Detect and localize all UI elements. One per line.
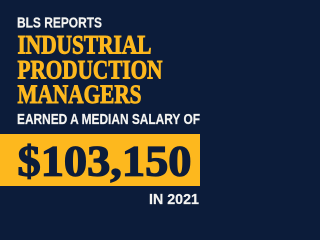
year label: IN 2021 (149, 192, 199, 208)
heading: occupation: INDUSTRIAL (18, 30, 152, 60)
salary figure: $103,150 (18, 138, 192, 186)
intro text: BLS REPORTS (17, 16, 102, 32)
heading: occupation: MANAGERS (18, 79, 142, 109)
infographic (0, 16, 200, 208)
heading: occupation (18, 30, 162, 109)
salary banner (0, 134, 200, 186)
heading: occupation: PRODUCTION (18, 55, 162, 85)
